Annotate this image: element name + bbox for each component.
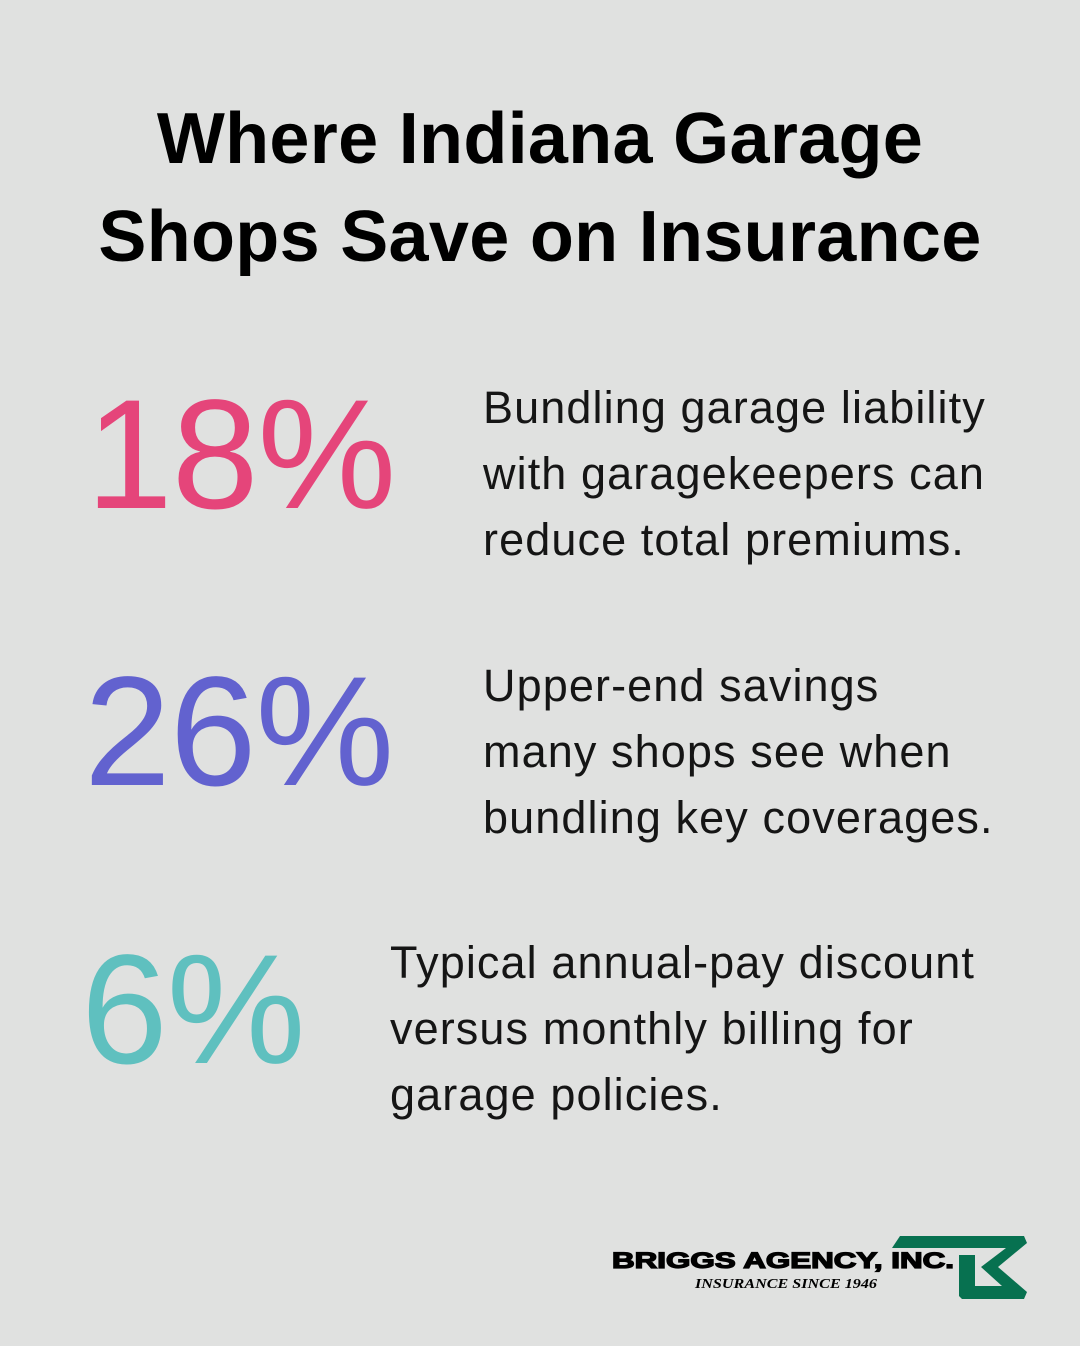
text: upper-end: Upper-end savings: [483, 660, 879, 711]
text: upper-end: many shops see when: [483, 726, 952, 777]
logo: [612, 1236, 1027, 1299]
title: [98, 99, 982, 277]
logo: INSURANCE SINCE 1946: [694, 1277, 877, 1292]
text: bundling: Bundling garage liability: [483, 382, 986, 433]
text: annual pay: versus monthly billing for: [390, 1003, 914, 1054]
stat 18%: 18%: [86, 368, 395, 542]
text: upper-end: bundling key coverages.: [483, 792, 994, 843]
text: annual pay: [390, 937, 975, 1120]
title: Where Indiana Garage: [157, 99, 923, 179]
text: annual pay: Typical annual-pay discount: [390, 937, 975, 988]
text: annual pay: garage policies.: [390, 1069, 723, 1120]
text: upper-end: [483, 660, 994, 843]
stat 26%: 26%: [84, 645, 393, 819]
title: Shops Save on Insurance: [98, 197, 982, 277]
text: bundling: reduce total premiums.: [483, 514, 965, 565]
text: bundling: with garagekeepers can: [483, 448, 985, 499]
stat 6%: 6%: [81, 923, 304, 1097]
text: bundling: [483, 382, 986, 565]
logo: BRIGGS AGENCY, INC.: [612, 1248, 954, 1273]
